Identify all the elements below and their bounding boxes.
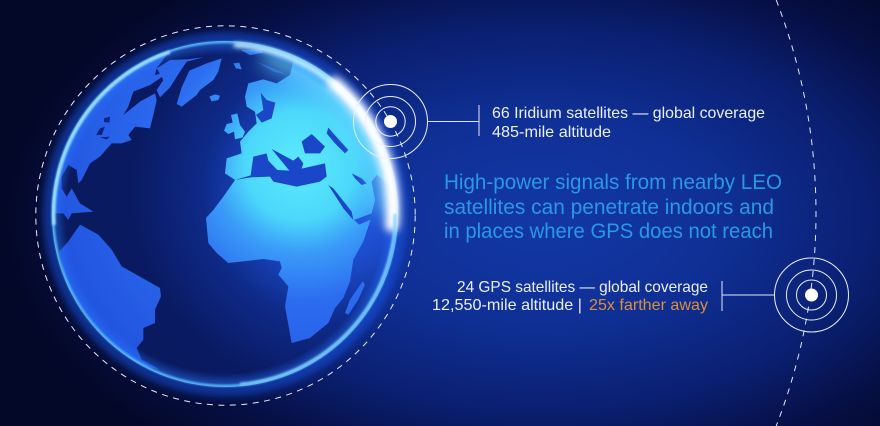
rim highlight: lower right arc bbox=[240, 214, 395, 384]
land: Svalbard bbox=[233, 49, 263, 69]
rim highlight: thin ring bbox=[53, 42, 397, 386]
inner orbit: Iridium dashed ring bbox=[36, 26, 415, 405]
globe inner rim shading bbox=[52, 41, 398, 387]
text: GPS callout: 25x farther away bbox=[589, 297, 708, 314]
land: British Isles bbox=[224, 113, 245, 139]
heading: LEO signal statement: High-power signals from nearby LEO bbox=[444, 170, 782, 194]
text: GPS callout bbox=[432, 279, 708, 314]
sea: Baltic bbox=[256, 93, 275, 123]
icon: Iridium satellite bbox=[354, 84, 428, 158]
heading: LEO signal statement: in places where GPS does not reach bbox=[444, 219, 773, 243]
rim highlight: soft hot spot near the satellite bbox=[335, 84, 393, 225]
text: Iridium callout: 485-mile altitude bbox=[492, 124, 611, 141]
land: Arctic islands bbox=[157, 57, 203, 97]
land: Eurasia and Africa bbox=[206, 56, 384, 343]
connector: GPS callout bbox=[722, 281, 775, 311]
seas overlaid on the land bbox=[235, 62, 367, 220]
sea: Red Sea bbox=[328, 185, 353, 220]
text: GPS callout: 12,550-mile altitude | bbox=[432, 297, 582, 314]
sea: Caspian bbox=[327, 128, 348, 153]
globe ocean bbox=[52, 41, 398, 387]
connector: Iridium callout bbox=[428, 105, 479, 136]
continents bbox=[52, 48, 389, 370]
sea: Black Sea bbox=[302, 134, 325, 153]
rim highlight: upper right bright arc bbox=[236, 45, 394, 214]
heading: LEO signal statement bbox=[444, 170, 782, 243]
outer orbit: GPS dashed arc bbox=[776, 0, 816, 426]
icon: GPS satellite bbox=[774, 258, 848, 332]
text: Iridium callout: 66 Iridium satellites — global coverage bbox=[492, 105, 765, 122]
sea: Persian Gulf bbox=[352, 173, 367, 185]
inner cyan haze near the bright limb bbox=[265, 50, 392, 214]
text: Iridium callout bbox=[492, 105, 765, 141]
heading: LEO signal statement: satellites can penetrate indoors and bbox=[444, 195, 774, 219]
land: Iceland bbox=[209, 94, 220, 101]
globe outer glow bbox=[49, 38, 401, 390]
land: North America bbox=[52, 54, 166, 220]
lakes: North America bbox=[96, 117, 110, 139]
land: South America bbox=[59, 225, 161, 370]
land: Greenland bbox=[177, 58, 222, 107]
sea: Mediterranean bbox=[235, 149, 327, 187]
rim highlight: left arc bbox=[54, 52, 170, 225]
globe bbox=[33, 33, 433, 390]
land: Madagascar bbox=[345, 281, 365, 315]
sea: Svalbard strait bbox=[257, 62, 288, 75]
text: GPS callout: 24 GPS satellites — global coverage bbox=[457, 279, 708, 296]
